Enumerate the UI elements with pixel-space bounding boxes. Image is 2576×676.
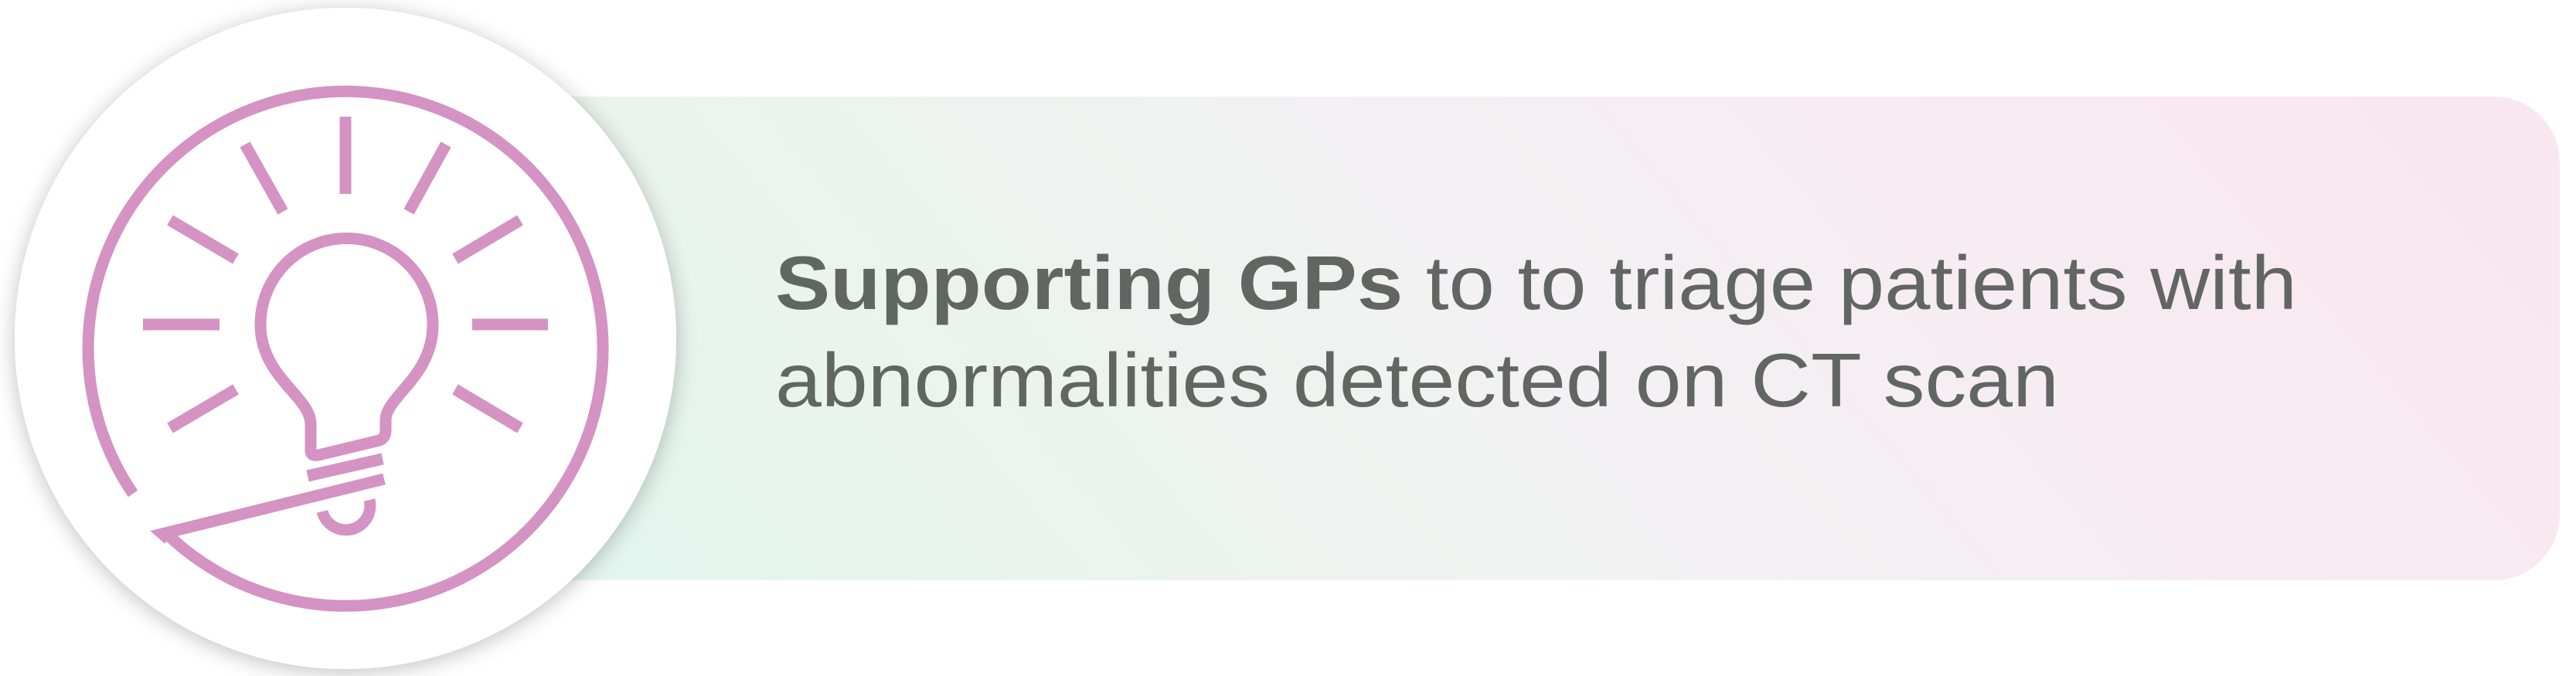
icon: lightbulb in circle — [15, 8, 676, 669]
text block: headline: Supporting GPs to to triage patients with — [775, 240, 2297, 325]
text block: headline — [775, 240, 2297, 423]
banner panel — [495, 97, 2560, 580]
text block: headline: abnormalities detected on CT scan — [775, 338, 2059, 423]
